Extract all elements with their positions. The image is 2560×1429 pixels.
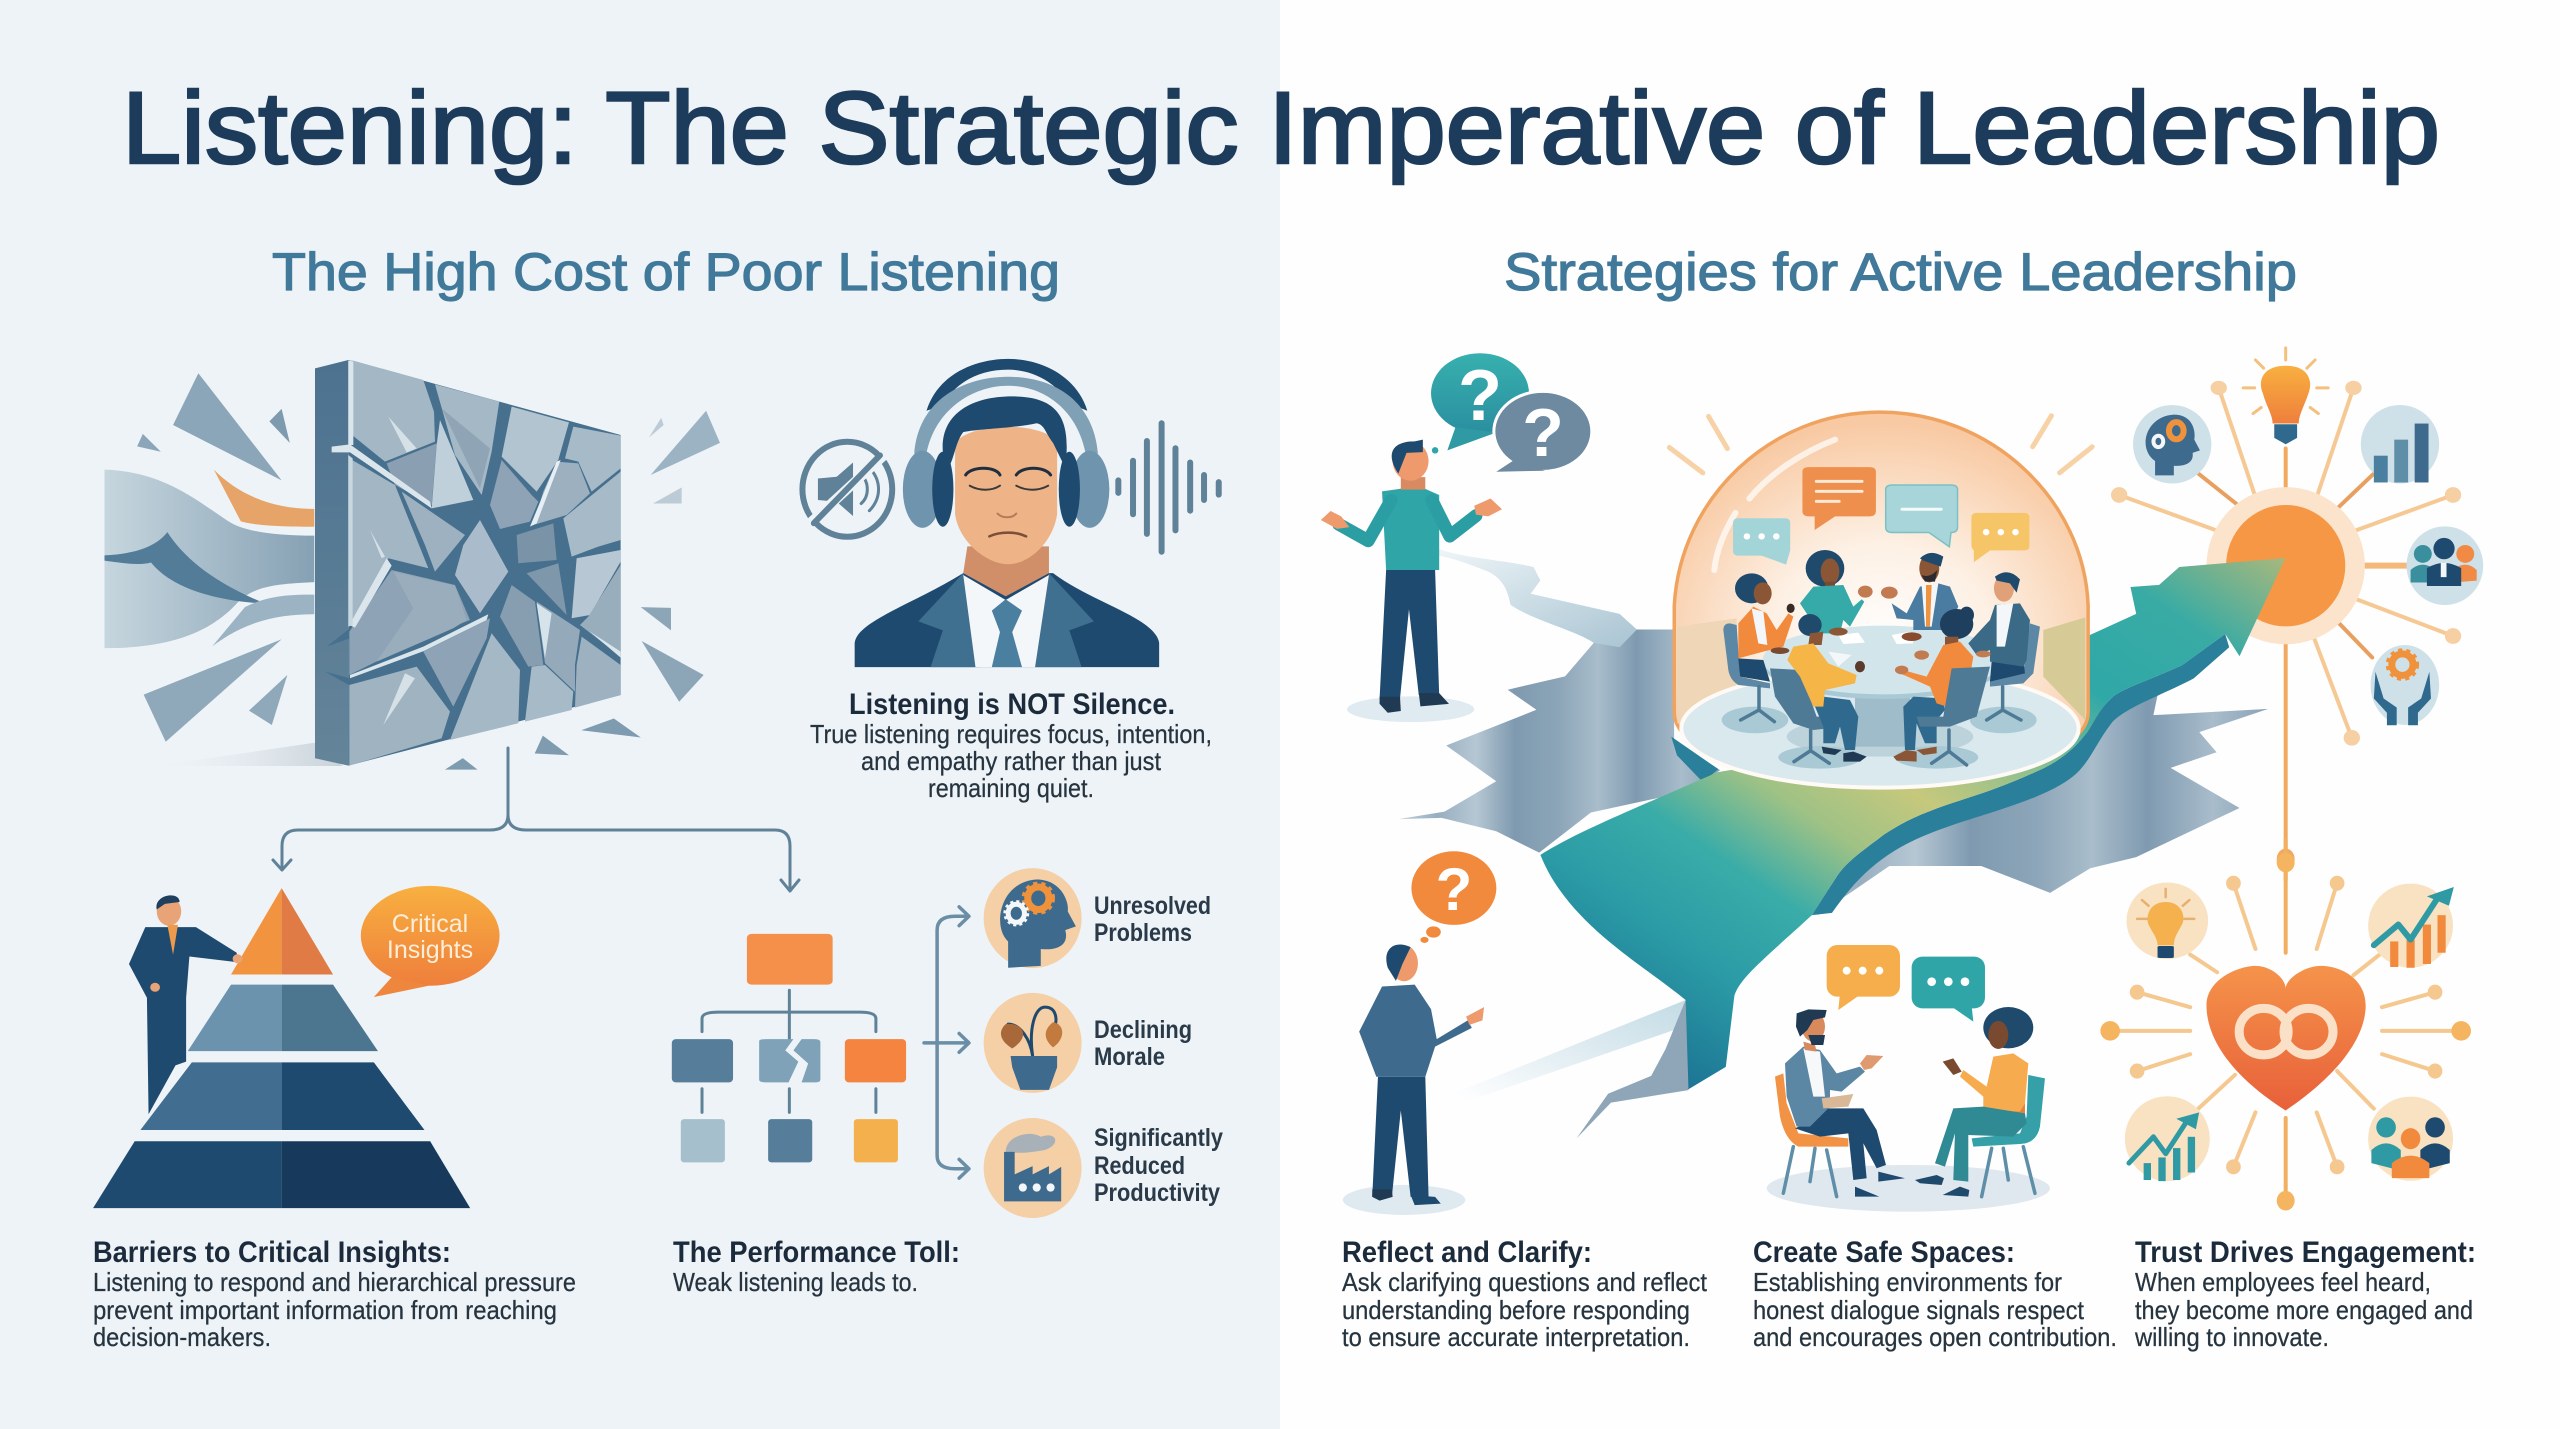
text block: reflect and clarify: Reflect and Clarify:	[1342, 1236, 1592, 1269]
icon: orange question bubble: ?	[1436, 856, 1472, 923]
person: back woman	[1800, 550, 1873, 636]
icon: team	[2406, 526, 2483, 605]
text block: the performance toll	[673, 1236, 960, 1297]
illustration: sun network	[2111, 381, 2461, 880]
text block: barriers to critical insights	[93, 1236, 576, 1352]
icon: lightbulb circle	[2127, 882, 2208, 959]
illustration: leader at pyramid	[93, 888, 470, 1208]
icon: muted speaker	[802, 442, 892, 537]
icon: unresolved problems	[984, 868, 1082, 968]
figure: man with open arms	[1321, 440, 1502, 722]
background: left panel	[0, 0, 1280, 1429]
illustration: shattered wall	[104, 360, 720, 770]
text block: create safe spaces: Establishing environments for	[1753, 1267, 2062, 1297]
figures: two people in conversation	[1767, 1007, 2050, 1212]
icon: growth chart circle upper	[2368, 884, 2454, 968]
icon: lightbulb top	[2243, 348, 2328, 444]
text block: listening is not silence: and empathy rather than just	[861, 746, 1162, 776]
text block: create safe spaces	[1753, 1236, 2117, 1352]
icon: reduced productivity factory	[984, 1118, 1082, 1218]
person: front yellow	[1770, 614, 1867, 763]
connector arrows from wall	[273, 748, 799, 891]
text block: trust drives engagement: Trust Drives Engagement:	[2135, 1236, 2476, 1269]
callout: critical insights: Critical	[392, 910, 468, 938]
text block: listening is not silence: Listening is NOT Silence.	[849, 688, 1175, 721]
text block: trust drives engagement	[2134, 1236, 2476, 1352]
labels: consequences: Reduced	[1094, 1152, 1185, 1180]
icon: bar chart	[2361, 405, 2439, 484]
arrows to consequences	[924, 907, 969, 1178]
labels: consequences	[1094, 892, 1223, 1207]
illustration: man with headphones	[855, 359, 1159, 667]
text block: reflect and clarify: Ask clarifying questions and reflect	[1342, 1267, 1708, 1297]
text block: create safe spaces: and encourages open contribution.	[1753, 1322, 2117, 1352]
team around table	[1677, 550, 2085, 788]
text block: barriers to critical insights: Barriers to Critical Insights:	[93, 1236, 451, 1269]
text block: create safe spaces: Create Safe Spaces:	[1753, 1236, 2015, 1269]
labels: consequences: Declining	[1094, 1016, 1192, 1044]
labels: consequences: Morale	[1094, 1043, 1165, 1071]
text block: barriers to critical insights: decision-makers.	[93, 1322, 271, 1352]
arrow: growth path across chasm	[1540, 558, 2285, 1089]
text block: reflect and clarify	[1342, 1236, 1708, 1352]
text block: trust drives engagement: they become more engaged and	[2135, 1295, 2473, 1325]
icon: teal question bubble	[1431, 353, 1529, 454]
text block: the performance toll: The Performance Toll:	[673, 1236, 960, 1269]
icon: growth chart circle lower	[2125, 1096, 2210, 1181]
labels: consequences: Unresolved	[1094, 892, 1211, 920]
icon: teal speech bubble	[1912, 957, 1985, 1022]
icon: sound waveform	[1118, 423, 1219, 552]
illustration: chasm	[1399, 549, 2268, 1138]
dome speech bubbles	[1733, 467, 2029, 565]
person: right man	[1968, 572, 2040, 720]
text block: listening is not silence: remaining quiet.	[928, 773, 1094, 803]
text block: listening is not silence: True listening requires focus, intention,	[810, 719, 1212, 749]
background: right panel	[1280, 0, 2560, 1429]
person: left woman	[1723, 573, 1795, 722]
person: front orange	[1893, 607, 1990, 765]
icon: head with gears	[2133, 405, 2211, 484]
text block: reflect and clarify: to ensure accurate interpretation.	[1342, 1322, 1690, 1352]
callout: critical insights: Insights	[387, 936, 473, 964]
text block: trust drives engagement: When employees feel heard,	[2135, 1267, 2431, 1297]
icon: teal question bubble: ?	[1458, 356, 1502, 436]
callout: critical insights	[361, 886, 500, 997]
text block: the performance toll: Weak listening leads to.	[673, 1267, 918, 1297]
heading: strategies for active leadership: Strategies for Active Leadership	[1504, 243, 2297, 302]
heading: the high cost of poor listening: The High Cost of Poor Listening	[272, 243, 1060, 302]
labels: consequences: Significantly	[1094, 1124, 1223, 1152]
text block: create safe spaces: honest dialogue signals respect	[1753, 1295, 2085, 1325]
illustration: trust heart hub	[2100, 840, 2471, 1210]
icon: grey question bubble	[1494, 391, 1592, 472]
labels: consequences: Productivity	[1094, 1179, 1220, 1207]
text block: barriers to critical insights: prevent important information from reaching	[93, 1295, 557, 1325]
icon: grey question bubble: ?	[1522, 395, 1564, 471]
icon: declining morale plant	[984, 993, 1082, 1093]
illustration: safe space dome	[1669, 412, 2092, 788]
chart: broken org chart	[672, 934, 906, 1162]
icon: people circle	[2368, 1097, 2453, 1181]
labels: consequences: Problems	[1094, 919, 1192, 947]
text block: barriers to critical insights: Listening to respond and hierarchical pressure	[93, 1267, 576, 1297]
person: back man	[1881, 553, 1958, 641]
text block: reflect and clarify: understanding before responding	[1342, 1295, 1690, 1325]
icon: orange question bubble	[1411, 851, 1496, 943]
text block: listening is not silence	[810, 688, 1212, 803]
title: Listening: The Strategic Imperative of Leadership	[122, 71, 2440, 185]
text block: trust drives engagement: willing to innovate.	[2134, 1322, 2329, 1352]
figure: man reflecting	[1343, 944, 1484, 1215]
icon: hands with gear	[2371, 645, 2439, 725]
icon: yellow speech bubble	[1827, 945, 1900, 1010]
